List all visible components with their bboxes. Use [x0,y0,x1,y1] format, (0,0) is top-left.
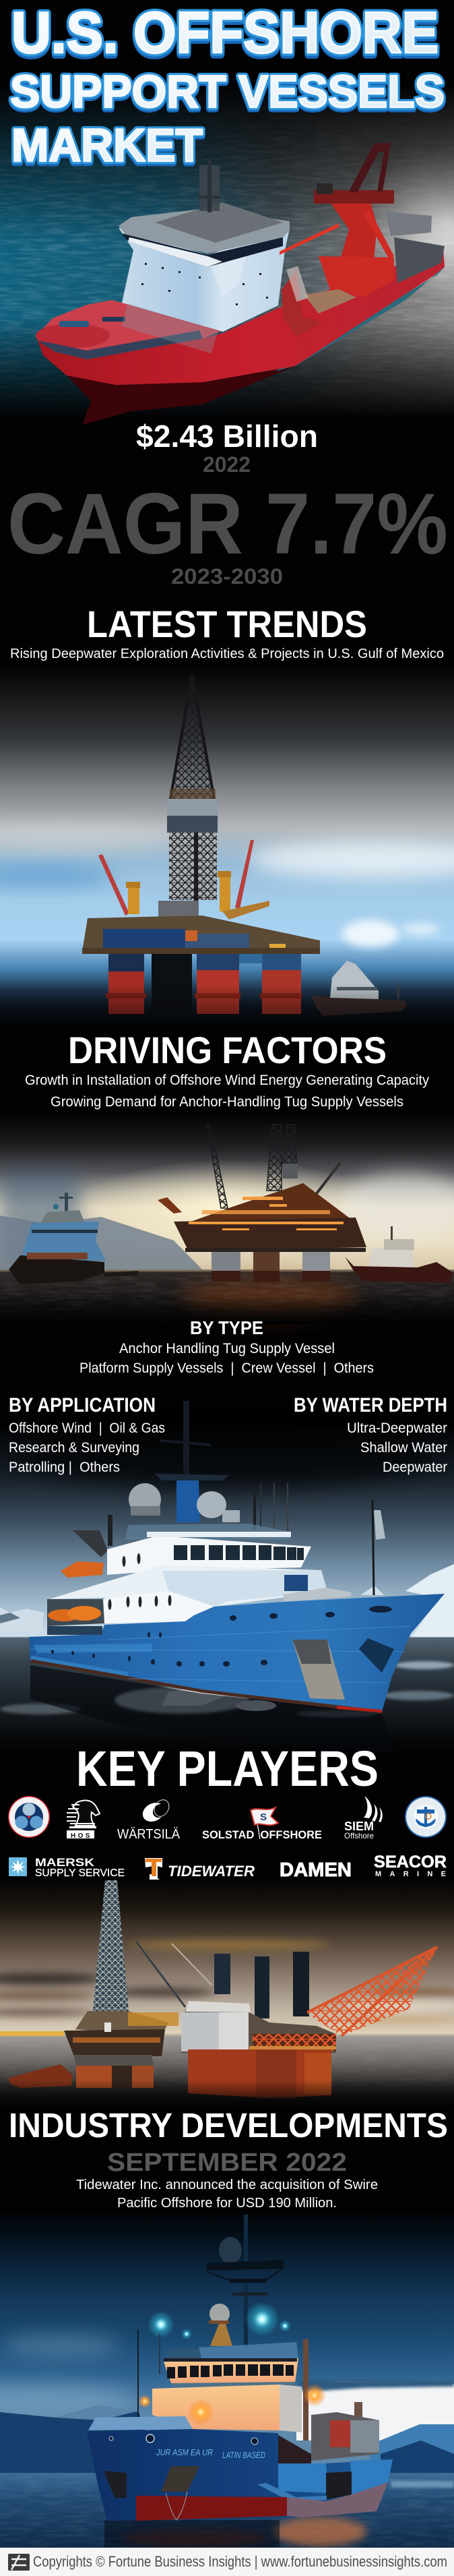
title line: MARKET: MARKET [11,121,203,173]
icebergs [0,1564,454,1637]
icon: jack-up platform [9,1880,185,2088]
logo: Damen: DAMEN [280,1859,352,1881]
logo: safety begins with me [8,1796,50,1838]
title line: MARKET: MARKET [11,119,203,171]
driver description: anchor-handling: Growing Demand for Anchor-Handling Tug Supply Vessels [51,1094,403,1110]
icon: production platform [158,1125,366,1282]
vessel underwater reflection [67,366,295,425]
development description line two: Pacific Offshore for USD 190 Million. [117,2196,337,2211]
logo: Edison Chouest Offshore [405,1796,447,1838]
logo: Solstad Offshore: S [260,1811,267,1823]
heading: driving factors: DRIVING FACTORS [68,1029,387,1071]
logo: Seacor Marine: MARINE [375,1870,446,1878]
title line: SUPPORT VESSELS: SUPPORT VESSELS [10,66,445,117]
panel: footer bar [0,2548,454,2576]
icon: blue support vessel [9,1193,138,1284]
mountains [0,2405,454,2473]
driver description: offshore wind: Growth in Installation of Offshore Wind Energy Generating Capacity [25,1073,429,1088]
logo: Siem Offshore: Offshore [344,1831,374,1840]
logo: HOS [67,1800,100,1840]
logo: Tidewater [145,1858,255,1883]
logo: Maersk Supply Service: SUPPLY SERVICE [35,1867,125,1879]
distant hills [0,1216,202,1269]
segment: by water depth [294,1394,447,1475]
depth: ultra-deepwater: Ultra-Deepwater [347,1420,447,1436]
base year: 2022 [203,452,251,477]
icon: dark vessel: JUR ASM EA UR [156,2447,213,2457]
panel: hero ship image [0,88,454,425]
water reflection of lights [273,2517,367,2546]
segment: by type [79,1317,374,1376]
panel: offshore platforms at dusk [0,1880,454,2112]
logo: Maersk Supply Service: MAERSK [35,1856,95,1869]
type list line one: Anchor Handling Tug Supply Vessel [119,1341,335,1356]
icon: dark vessel [87,2215,393,2521]
icon: hero vessel [36,143,445,425]
panel: research vessel in ice [0,1401,454,1753]
icon: white support vessel [345,1226,453,1283]
icon: dark vessel: LATIN BASED [222,2450,265,2460]
panel: company logos [8,1796,447,1883]
segment: by application [9,1394,165,1475]
title line: MARKET: MARKET [11,119,203,171]
logo: Seacor Marine: SEACOR [374,1853,447,1871]
title line: SUPPORT VESSELS: SUPPORT VESSELS [10,66,445,117]
logo: Wartsila: WÄRTSILÄ [117,1827,181,1842]
trend description: Rising Deepwater Exploration Activities & Projects in U.S. Gulf of Mexico [10,647,444,661]
icon: semi-submersible platform [172,1944,437,2098]
title [10,1,445,173]
icon: oil rig [82,674,320,1014]
logo: HOS: HOS [71,1832,92,1840]
logo: Tidewater: TIDEWATER [168,1863,255,1880]
logo: Siem Offshore: SIEM [344,1820,374,1833]
depth: deepwater: Deepwater [383,1460,447,1475]
panel: drilling rig image [0,667,454,1025]
heading: by type: BY TYPE [190,1317,263,1338]
application list line three: Patrolling | Others [9,1460,120,1475]
development date: SEPTEMBER 2022 [107,2149,347,2177]
panel: sunset rig and vessels image [0,1116,454,1325]
icon: Fortune Business Insights logo [8,2554,30,2571]
development description line one: Tidewater Inc. announced the acquisition of Swire [76,2178,378,2192]
ship reflection [30,1665,394,1753]
title line: SUPPORT VESSELS: SUPPORT VESSELS [10,68,445,119]
logo: Wartsila [117,1797,181,1842]
heading: by application: BY APPLICATION [9,1394,156,1416]
logo: Solstad Offshore: SOLSTAD OFFSHORE [202,1828,322,1841]
application list line two: Research & Surveying [9,1440,139,1456]
heading: key players: KEY PLAYERS [76,1741,379,1797]
title line: U.S. OFFSHORE: U.S. OFFSHORE [11,1,439,65]
heading: latest trends: LATEST TRENDS [87,603,367,645]
icon: support vessel [311,961,407,1016]
logo: Solstad Offshore [202,1807,322,1841]
icon: research vessel [29,1401,445,1714]
application list line one: Offshore Wind | Oil & Gas [9,1420,165,1436]
type list line two: Platform Supply Vessels | Crew Vessel | Others [79,1360,374,1376]
logo: Siem Offshore [344,1796,383,1840]
market value: $2.43 Billion [136,419,318,454]
clouds [0,1940,454,2021]
market size stats [7,419,448,589]
forecast period: 2023-2030 [171,564,283,589]
logo: Maersk Supply Service [9,1856,125,1879]
title line: U.S. OFFSHORE: U.S. OFFSHORE [11,1,439,65]
ice floes [0,1661,454,1717]
panel: vessel at night [0,2211,454,2548]
title line: U.S. OFFSHORE: U.S. OFFSHORE [11,3,439,68]
depth: shallow water: Shallow Water [360,1440,447,1456]
